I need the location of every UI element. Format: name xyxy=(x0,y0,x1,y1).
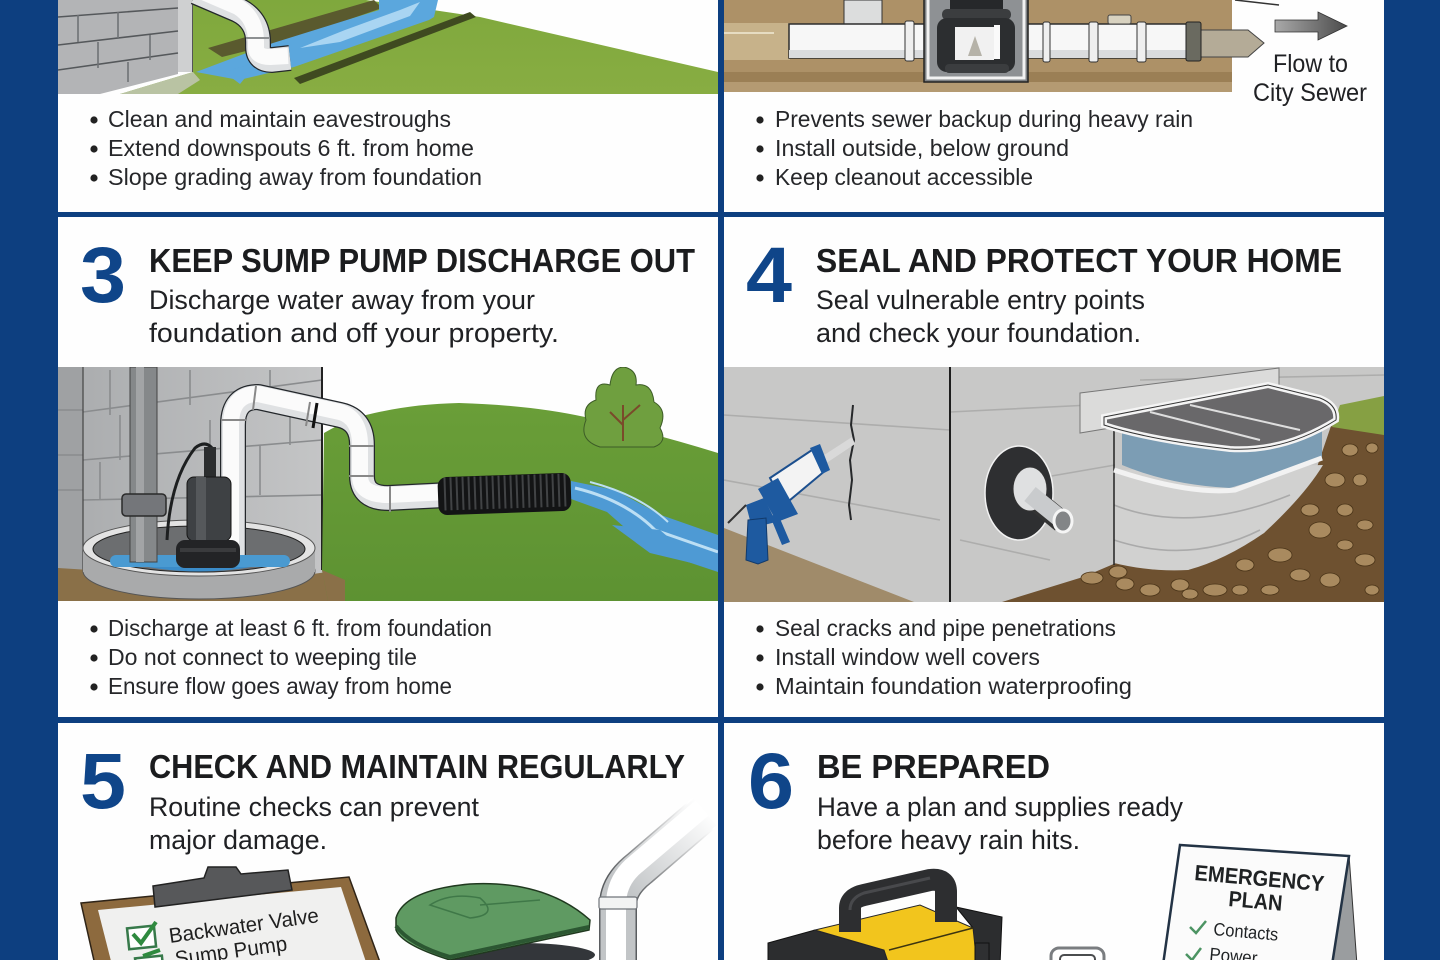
tree xyxy=(584,367,663,447)
subtitle xyxy=(149,285,559,348)
bullet list: Install window well covers xyxy=(775,644,1040,670)
illustration: toolbox and emergency plan xyxy=(768,845,1357,960)
bullet list: Seal cracks and pipe penetrations xyxy=(775,615,1116,641)
bullet list: Keep cleanout accessible xyxy=(775,164,1033,190)
panel 1: downspouts and grading xyxy=(58,0,718,212)
pipe penetration xyxy=(985,446,1053,540)
emergency plan sign: EMERGENCY xyxy=(1194,860,1326,896)
well body xyxy=(1114,465,1323,570)
bullet list: Clean and maintain eavestroughs xyxy=(108,106,451,132)
heading: SEAL AND PROTECT YOUR HOME xyxy=(816,242,1342,279)
heading: CHECK AND MAINTAIN REGULARLY xyxy=(149,748,685,785)
subtitle xyxy=(816,285,1145,348)
illustration: sealing cracks and window well xyxy=(724,367,1384,602)
white vent pipe xyxy=(618,812,705,960)
rim and grate xyxy=(1104,385,1336,449)
subtitle xyxy=(817,792,1183,855)
panel 5: check and maintain xyxy=(58,723,718,960)
emergency plan sign: Contacts xyxy=(1213,919,1279,945)
sump ring xyxy=(82,568,316,600)
bullet list: Extend downspouts 6 ft. from home xyxy=(108,135,474,161)
bullet list: Install outside, below ground xyxy=(775,135,1069,161)
label: flow to city sewer xyxy=(1253,50,1367,107)
illustration: clipboard checklist and valve lid xyxy=(81,808,705,960)
label: flow to city sewer: Flow to xyxy=(1273,50,1348,78)
subtitle: foundation and off your property. xyxy=(149,318,559,348)
bullet list xyxy=(90,106,482,190)
bullet list: Slope grading away from foundation xyxy=(108,164,482,190)
bullet list: Discharge at least 6 ft. from foundation xyxy=(108,615,492,641)
small handle xyxy=(1051,948,1104,960)
heading: BE PREPARED xyxy=(817,748,1050,785)
subtitle: before heavy rain hits. xyxy=(817,825,1080,855)
emergency plan sign: PLAN xyxy=(1228,886,1284,916)
submersible pump xyxy=(167,444,212,540)
caulk gun xyxy=(824,437,855,462)
bullet list: Do not connect to weeping tile xyxy=(108,644,417,670)
panel 2: backwater valve xyxy=(724,0,1384,212)
panel 3: sump pump discharge xyxy=(58,217,718,717)
subtitle: major damage. xyxy=(149,825,327,855)
arrow: flow direction xyxy=(1275,12,1347,40)
subtitle: Have a plan and supplies ready xyxy=(817,792,1183,822)
number 5: 5 xyxy=(80,736,126,825)
wall plate xyxy=(1080,368,1279,433)
blue glass xyxy=(1122,432,1322,488)
vertical pipe xyxy=(130,367,157,562)
bullet list: Ensure flow goes away from home xyxy=(108,673,452,699)
bullet list xyxy=(90,615,492,699)
rocks xyxy=(1081,443,1379,599)
panel 4: seal and protect xyxy=(724,217,1384,717)
illustration: sump pump and discharge hose xyxy=(58,367,718,601)
illustration: downspout and grading xyxy=(58,0,718,94)
subtitle: Discharge water away from your xyxy=(149,285,535,315)
heading: KEEP SUMP PUMP DISCHARGE OUT xyxy=(149,242,695,279)
label: flow to city sewer: City Sewer xyxy=(1253,79,1367,107)
number 3: 3 xyxy=(80,230,126,319)
subtitle: Routine checks can prevent xyxy=(149,792,479,822)
subtitle: Seal vulnerable entry points xyxy=(816,285,1145,315)
number 4: 4 xyxy=(746,230,792,319)
illustration: backwater valve xyxy=(724,0,1279,92)
hose and water xyxy=(571,481,718,572)
bullet list: Prevents sewer backup during heavy rain xyxy=(775,106,1193,132)
bullet list xyxy=(756,106,1193,190)
bullet list xyxy=(756,615,1132,699)
white discharge pipe xyxy=(233,397,448,555)
clipboard: Backwater Valve xyxy=(167,904,320,948)
subtitle: and check your foundation. xyxy=(816,318,1141,348)
valve lid xyxy=(445,943,595,960)
toolbox xyxy=(768,878,1002,960)
panel 6: be prepared xyxy=(724,723,1384,960)
subtitle xyxy=(149,792,479,855)
emergency plan sign xyxy=(1163,845,1357,960)
number 6: 6 xyxy=(748,736,794,825)
clipboard xyxy=(81,867,381,960)
crack xyxy=(849,405,854,520)
bullet list: Maintain foundation waterproofing xyxy=(775,673,1132,699)
